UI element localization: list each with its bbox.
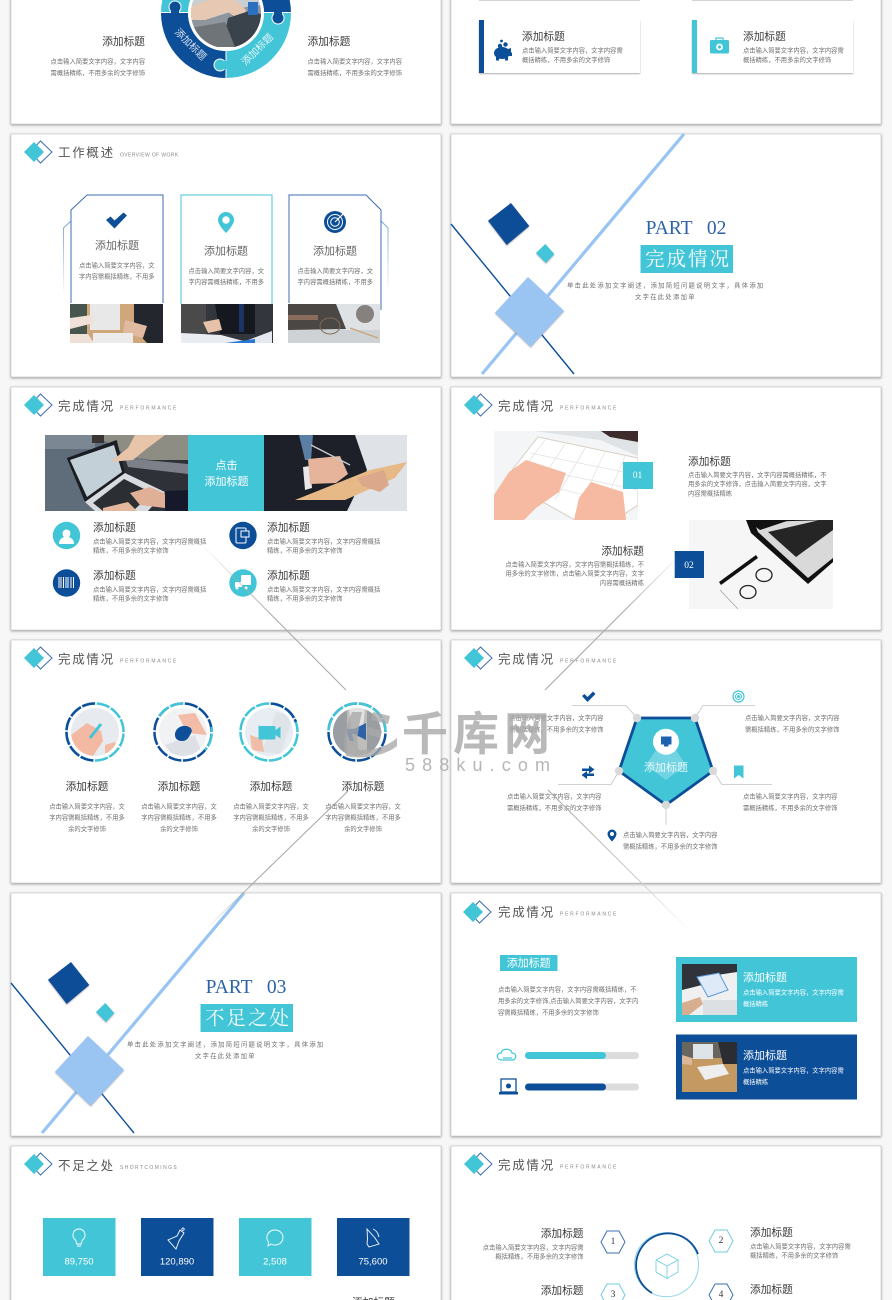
item: delivery: 添加标题 <box>267 569 310 582</box>
section description: 单击此处添加文字阐述，添加简短问题说明文字，具体添加 <box>567 280 765 289</box>
step 1: 1 <box>611 1237 616 1247</box>
text: lower right: 点击输入简要文字内容，文字内容 <box>743 791 838 800</box>
round item 2: 点击输入简要文字内容，文 <box>141 801 217 810</box>
stat box 1 <box>43 1218 116 1276</box>
heading <box>58 398 178 413</box>
heading <box>58 651 178 666</box>
photo: team documents <box>682 964 737 1015</box>
dark square <box>488 203 529 245</box>
card: dark blue: 添加标题 <box>743 1048 787 1062</box>
slide: pentagon diagram <box>451 640 881 883</box>
icon: barcode <box>59 577 74 588</box>
card: briefcase: 点击输入简要文字内容，文字内容需 <box>743 45 844 54</box>
text block 2: 添加标题 <box>601 544 644 557</box>
pentagon: 添加标题 <box>644 760 688 774</box>
round item 2: 添加标题 <box>158 780 201 793</box>
text: upper right: 点击输入简要文字内容，文字内容 <box>745 713 840 722</box>
text block 1 <box>688 455 827 497</box>
right text block: 添加标题 <box>308 35 351 48</box>
teal title block: 添加标题 <box>204 474 248 488</box>
section description: 文字在此处添加单 <box>635 292 696 301</box>
slide: part 02 divider <box>451 134 881 377</box>
section description <box>567 280 765 301</box>
heading <box>498 1157 618 1172</box>
decorative diagonal lines <box>451 134 684 374</box>
round item 3: 字内容需概括精练，不用多 <box>233 812 309 821</box>
step 4: 4 <box>719 1290 724 1300</box>
icon: monitor chart <box>661 736 672 746</box>
icon: speaker <box>367 1229 379 1247</box>
photo: glasses on desk <box>288 304 380 343</box>
logo diamond <box>24 394 52 416</box>
section description: 单击此处添加文字阐述，添加简短问题说明文字，具体添加 <box>127 1039 325 1048</box>
number badge 02 <box>675 551 704 578</box>
round photo: hand and stationery <box>159 708 207 756</box>
body text: 容需概括精练，不用多余的文字修饰 <box>498 1007 599 1016</box>
stat box 3: 2,508 <box>263 1256 287 1267</box>
item: barcode <box>53 569 207 602</box>
round item 1 <box>49 704 125 833</box>
item: support: 点击输入简要文字内容，文字内容需概括 <box>93 536 207 545</box>
item: delivery: 精练，不用多余的文字修饰 <box>267 593 343 602</box>
card: briefcase: 概括精练，不用多余的文字修饰 <box>743 55 831 64</box>
text: lower left <box>507 791 602 812</box>
icon: target <box>324 211 346 233</box>
heading: OVERVIEW OF WORK <box>120 152 179 158</box>
card: piggy bank: 添加标题 <box>522 30 565 43</box>
icon: palette <box>175 726 192 741</box>
icon: check <box>106 212 127 228</box>
part label: PART 03 <box>206 977 286 998</box>
body text: 用多余的文字修饰,点击输入简要文字内容，文字内 <box>498 996 638 1005</box>
text: lower left: 点击输入简要文字内容，文字内容 <box>507 791 602 800</box>
card: dark blue <box>676 1034 857 1100</box>
round item 2: 字内容需概括精练，不用多 <box>141 812 217 821</box>
slide: puzzle ring partial <box>11 0 441 124</box>
number badge 02: 02 <box>684 561 694 571</box>
item: tablet: 添加标题 <box>267 521 310 534</box>
logo diamond <box>24 647 52 669</box>
right text block: 点击输入简要文字内容，文字内容 <box>308 56 403 65</box>
teal title block <box>188 435 264 511</box>
round item 1: 余的文字修饰 <box>68 824 106 833</box>
heading: PERFORMANCE <box>560 405 618 411</box>
puzzle ring diagram <box>161 0 291 78</box>
item: barcode: 添加标题 <box>93 569 136 582</box>
card 2: 字内容需概括精练，不用多 <box>188 277 264 286</box>
text: bottom: 需概括精练，不用多余的文字修饰 <box>623 841 717 850</box>
logo diamond <box>464 1153 492 1175</box>
watermark: 千库网 <box>402 708 555 760</box>
body text: 点击输入简要文字内容，文字内容需概括精练，不 <box>498 984 637 993</box>
ring with box icon <box>634 1233 698 1297</box>
icon: bookmark <box>734 766 744 778</box>
step 1: 概括精练，不用多余的文字修饰 <box>495 1251 584 1260</box>
round item 3: 余的文字修饰 <box>252 824 290 833</box>
heading <box>498 651 618 666</box>
light blue diamond <box>495 277 564 347</box>
logo diamond <box>24 1153 52 1175</box>
icon: operator <box>59 530 74 544</box>
icon: swap arrows <box>582 766 594 779</box>
section title: 完成情况 <box>645 248 731 270</box>
step 2 <box>709 1226 851 1259</box>
heading: 不足之处 <box>58 1159 115 1173</box>
tag title <box>500 955 558 971</box>
item: support <box>53 521 207 554</box>
photo: signing <box>181 304 273 343</box>
connector lines <box>558 706 772 825</box>
round item 1: 点击输入简要文字内容，文 <box>49 801 125 810</box>
card: piggy bank <box>479 20 640 73</box>
progress bar 2 <box>525 1084 639 1090</box>
item: support: 添加标题 <box>93 521 136 534</box>
watermark: 588ku.com <box>405 755 550 775</box>
round item 4: 字内容需概括精练，不用多 <box>325 812 401 821</box>
card 3: 字内容需概括精练，不用多 <box>298 277 373 286</box>
step 1: 点击输入简要文字内容，文字内容需 <box>483 1242 584 1251</box>
dark square <box>48 962 89 1004</box>
heading: 工作概述 <box>58 146 115 160</box>
icon: tablet <box>236 528 249 543</box>
icon: cube <box>656 1254 678 1278</box>
stat box 1: 89,750 <box>64 1256 94 1267</box>
step 3: 添加标题 <box>541 1284 584 1297</box>
watermark <box>200 543 694 935</box>
section description: 文字在此处添加单 <box>195 1051 256 1060</box>
card 1: 添加标题 <box>95 238 139 252</box>
right text block <box>308 35 403 77</box>
card 2: 点击输入简要文字内容，文 <box>188 266 265 275</box>
icon: paperclip <box>90 724 101 738</box>
card: briefcase <box>692 20 853 73</box>
card 2 <box>181 195 273 343</box>
slide: work overview <box>11 134 441 377</box>
icon: megaphone <box>347 723 366 741</box>
slide: progress and cards <box>451 893 881 1136</box>
card: dark blue: 概括精练 <box>743 1077 769 1086</box>
text: bottom: 点击输入简要文字内容，文字内容 <box>623 830 718 839</box>
body text <box>498 984 638 1016</box>
photo: keyboard typing <box>494 431 638 520</box>
heading <box>498 904 618 919</box>
stat box 4: 75,600 <box>358 1256 388 1267</box>
photo: desk meeting <box>682 1042 737 1092</box>
round item 4: 添加标题 <box>342 780 385 793</box>
item: barcode: 点击输入简要文字内容，文字内容需概括 <box>93 584 207 593</box>
heading: PERFORMANCE <box>560 911 618 917</box>
left text block: 点击输入简要文字内容，文字内容 <box>51 56 146 65</box>
section title <box>640 245 733 273</box>
card: teal: 点击输入简要文字内容，文字内容需 <box>743 987 844 996</box>
text: upper right <box>745 713 840 733</box>
teal title block: 点击 <box>216 459 238 472</box>
round item 2 <box>141 703 217 833</box>
heading <box>58 1159 178 1173</box>
slide: cards partial <box>451 0 881 124</box>
icon: check <box>582 692 596 702</box>
round item 4: 余的文字修饰 <box>344 824 382 833</box>
round item 3 <box>233 703 309 833</box>
card: teal <box>676 957 857 1022</box>
icon: video camera <box>258 726 280 740</box>
text: upper left: 点击输入简要文字内容，文字内容 <box>509 713 604 722</box>
part label: PART 02 <box>646 218 726 239</box>
progress bar 1 <box>525 1052 639 1059</box>
text block 1: 用多余的文字修饰，点击输入简要文字内容，文字 <box>688 479 827 488</box>
teal square <box>536 244 554 263</box>
photo: meeting <box>70 304 163 343</box>
puzzle ring diagram: 添加标题 <box>239 31 276 68</box>
text block 2: 内容需概括精练 <box>600 578 645 587</box>
left text block: 需概括精练，不用多余的文字修饰 <box>51 68 145 77</box>
icon: truck with box <box>235 575 251 590</box>
heading <box>58 146 179 160</box>
logo diamond <box>24 141 52 163</box>
number badge 01 <box>623 462 653 489</box>
heading: 完成情况 <box>58 651 115 666</box>
icon: laptop wifi <box>499 1079 518 1094</box>
item: barcode: 精练，不用多余的文字修饰 <box>93 593 169 602</box>
text block 1: 添加标题 <box>688 455 731 468</box>
icon: briefcase <box>710 38 729 54</box>
logo diamond <box>464 394 492 416</box>
heading: PERFORMANCE <box>560 658 618 664</box>
step 2: 添加标题 <box>750 1226 793 1239</box>
logo diamond <box>463 901 491 923</box>
photo: laptop and glasses <box>689 520 833 609</box>
number badge 01: 01 <box>633 471 642 481</box>
heading: 完成情况 <box>58 398 115 413</box>
card: teal: 概括精练 <box>743 999 769 1008</box>
step 3 <box>541 1284 625 1300</box>
card 3 <box>288 195 388 343</box>
text: lower right: 需概括精练，不用多余的文字修饰 <box>743 803 837 812</box>
heading: 完成情况 <box>498 398 555 413</box>
item: support: 精练，不用多余的文字修饰 <box>93 545 169 554</box>
card 2: 添加标题 <box>204 243 248 257</box>
icon: piggy bank <box>494 40 512 60</box>
step 4 <box>709 1283 793 1300</box>
slide: four round photos <box>11 640 441 883</box>
stat box 2 <box>141 1218 214 1276</box>
step 3: 3 <box>611 1290 616 1300</box>
heading: PERFORMANCE <box>560 1164 618 1170</box>
stat box 2: 120,890 <box>160 1256 194 1267</box>
round photo: library <box>333 708 381 756</box>
step 1 <box>483 1227 625 1260</box>
step 4: 添加标题 <box>750 1283 793 1296</box>
heading: 完成情况 <box>498 651 555 666</box>
card: piggy bank: 概括精练，不用多余的文字修饰 <box>522 55 610 64</box>
item: tablet: 精练，不用多余的文字修饰 <box>267 545 343 554</box>
icon: cloud <box>497 1049 516 1060</box>
text: upper left: 需概括精练，不用多余的文字修饰 <box>509 724 603 733</box>
card 3: 添加标题 <box>313 243 357 257</box>
text block 1: 内容需概括精练 <box>688 488 733 497</box>
heading: PERFORMANCE <box>120 658 178 664</box>
section title <box>200 1004 293 1032</box>
light blue diamond <box>55 1036 124 1106</box>
card: briefcase: 添加标题 <box>743 30 786 43</box>
right text block: 需概括精练，不用多余的文字修饰 <box>308 68 402 77</box>
photo: signing clipboard <box>264 435 407 511</box>
tag title: 添加标题 <box>507 955 551 969</box>
round item 4 <box>325 704 401 833</box>
text block 1: 点击输入简要文字内容，文字内容需概括精练，不 <box>688 470 827 479</box>
round photo: typing <box>71 708 119 756</box>
round photo: clipboard <box>245 708 293 756</box>
pentagon <box>615 714 717 809</box>
step 2: 点击输入简要文字内容，文字内容需 <box>750 1241 851 1250</box>
slide: performance photos <box>451 387 881 630</box>
round item 2: 余的文字修饰 <box>160 824 198 833</box>
slide: performance banner <box>11 387 441 630</box>
text: lower right <box>743 791 838 812</box>
slide: hexagon steps <box>451 1146 881 1300</box>
teal square <box>96 1003 114 1022</box>
icon: target <box>733 691 744 702</box>
step 2: 2 <box>719 1236 724 1246</box>
stat box 3 <box>239 1218 312 1276</box>
item: tablet: 点击输入简要文字内容，文字内容需概括 <box>267 536 381 545</box>
text block 2: 用多余的文字修饰，点击输入简要文字内容，文字 <box>505 568 644 577</box>
round item 1: 添加标题 <box>66 780 109 793</box>
left text block <box>51 35 146 77</box>
text: bottom <box>623 830 718 850</box>
round item 1: 字内容需概括精练，不用多 <box>49 812 125 821</box>
card 1 <box>64 195 163 343</box>
text block 2 <box>505 544 645 587</box>
section description <box>127 1039 325 1060</box>
text: upper left <box>509 713 604 733</box>
heading: 完成情况 <box>498 904 555 919</box>
card 1: 字内容需概括精练，不用多 <box>79 271 155 280</box>
slide: shortcomings <box>11 1146 441 1300</box>
slide: part 03 divider <box>11 893 441 1136</box>
icon: map pin <box>218 212 234 233</box>
puzzle ring diagram: 添加标题 <box>172 26 209 63</box>
heading <box>498 398 618 413</box>
icon: pin <box>608 830 616 842</box>
photo: laptop <box>45 435 188 511</box>
decorative diagonal lines <box>11 893 244 1133</box>
icon: speech bubble <box>267 1230 283 1246</box>
logo diamond <box>464 647 492 669</box>
item: tablet <box>229 521 381 554</box>
section title: 不足之处 <box>205 1007 291 1029</box>
heading: SHORTCOMINGS <box>120 1165 178 1171</box>
stat box 4 <box>337 1218 410 1276</box>
left text block: 添加标题 <box>102 35 145 48</box>
card: dark blue: 点击输入简要文字内容，文字内容需 <box>743 1065 844 1074</box>
item: delivery: 点击输入简要文字内容，文字内容需概括 <box>267 584 381 593</box>
text: upper right: 需概括精练，不用多余的文字修饰 <box>745 724 839 733</box>
icon: light bulb <box>73 1229 85 1246</box>
card: piggy bank: 点击输入简要文字内容，文字内容需 <box>522 45 623 54</box>
round item 4: 点击输入简要文字内容，文 <box>325 801 401 810</box>
round item 3: 添加标题 <box>250 780 293 793</box>
text: lower left: 需概括精练，不用多余的文字修饰 <box>507 803 601 812</box>
text block 2: 点击输入简要文字内容，文字内容需概括精练，不 <box>505 559 645 568</box>
step 2: 概括精练，不用多余的文字修饰 <box>750 1250 838 1259</box>
card 1: 点击输入简要文字内容，文 <box>79 260 155 269</box>
heading: 完成情况 <box>498 1157 555 1172</box>
icon: flask <box>168 1228 184 1249</box>
round item 3: 点击输入简要文字内容，文 <box>233 801 309 810</box>
card: teal: 添加标题 <box>743 970 787 984</box>
item: delivery <box>229 569 381 602</box>
step 1: 添加标题 <box>541 1227 584 1240</box>
card 3: 点击输入简要文字内容，文 <box>298 266 374 275</box>
heading: PERFORMANCE <box>120 405 178 411</box>
